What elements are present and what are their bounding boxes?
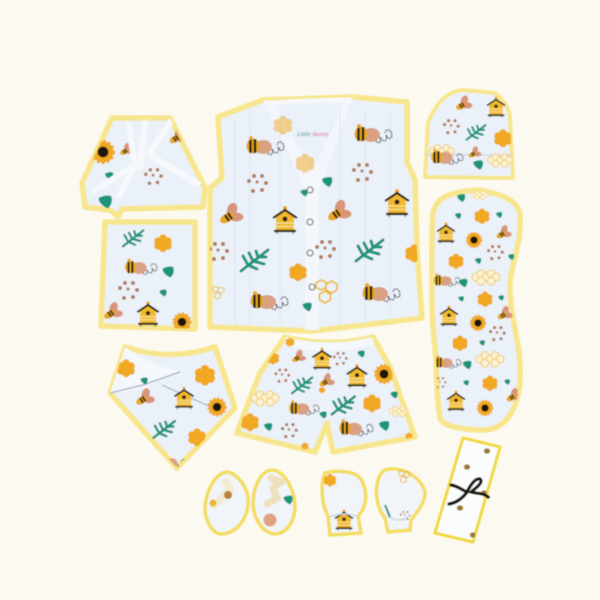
- rolled swaddle with ribbon: [435, 438, 500, 542]
- left mitten: [322, 471, 366, 535]
- vest: [208, 97, 423, 331]
- square wipe: [101, 222, 195, 330]
- left bootie: [205, 472, 248, 534]
- shorts: [237, 337, 415, 452]
- burp cloth: [432, 190, 522, 430]
- bib: [110, 347, 235, 468]
- black ribbon bow: [449, 479, 488, 504]
- snap buttons: [307, 187, 315, 290]
- right bootie: [253, 470, 295, 534]
- right mitten: [376, 469, 425, 532]
- cloth diaper: [82, 118, 205, 217]
- vest label: Little Bunny: [296, 131, 329, 138]
- baby cap: [425, 90, 513, 178]
- booties: [205, 470, 295, 534]
- mittens: [322, 469, 425, 535]
